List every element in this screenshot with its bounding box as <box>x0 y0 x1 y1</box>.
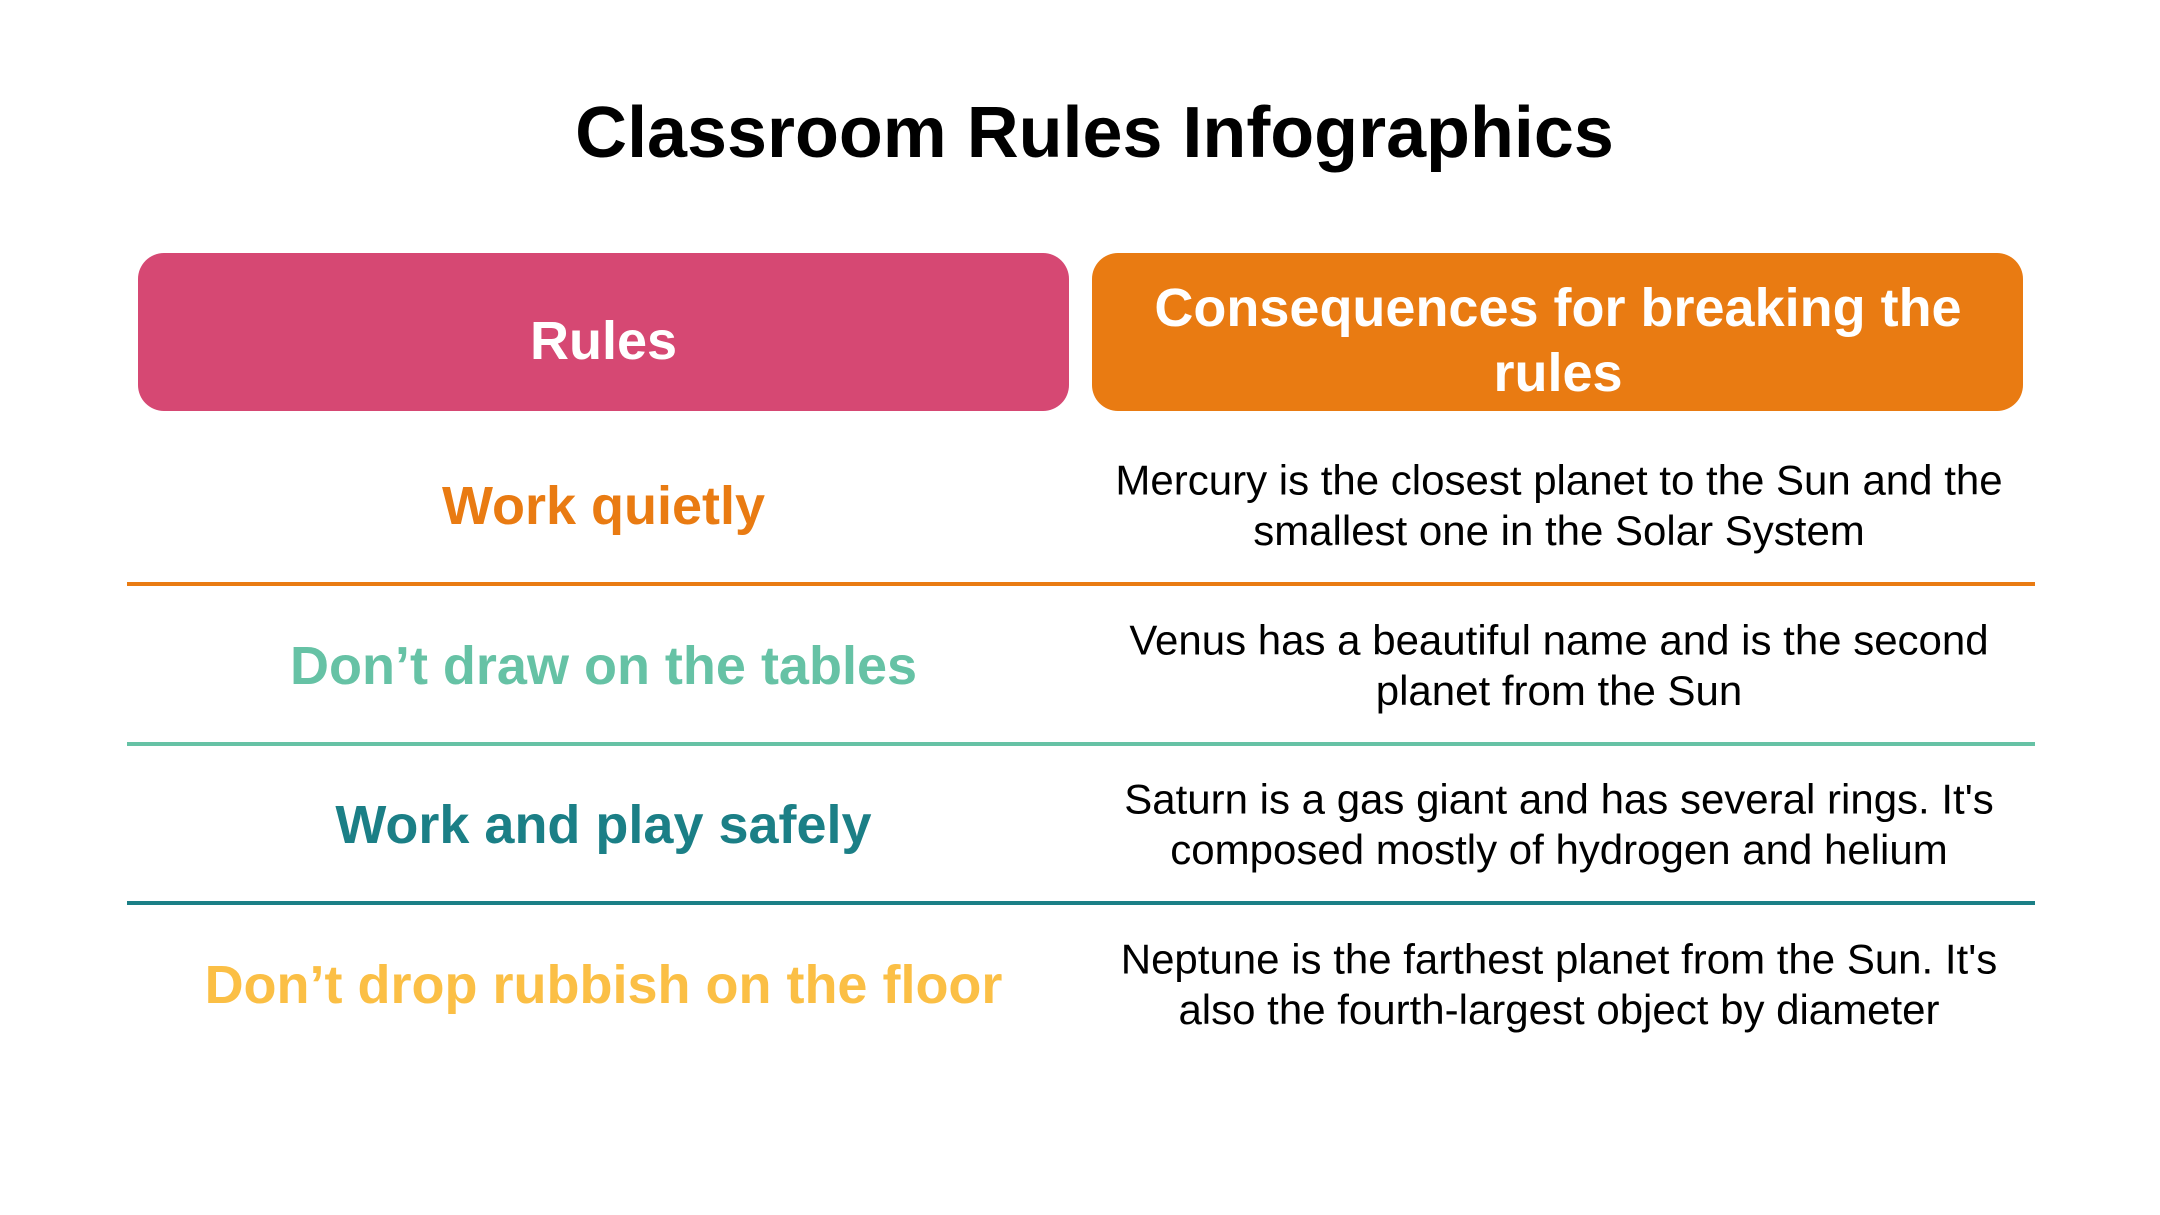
row 1: work quietly: Mercury is the closest planet to the Sun and the <box>1115 456 2003 504</box>
row 4: don't drop rubbish on the floor: also the fourth-largest object by diameter <box>1178 986 1940 1033</box>
panel: consequences header: Consequences for breaking the <box>1154 278 1962 338</box>
title: Classroom Rules Infographics <box>575 93 1614 173</box>
panel: consequences header <box>1092 253 2023 411</box>
row 4: don't drop rubbish on the floor <box>205 936 1997 1033</box>
row 3: work and play safely: Work and play safely <box>335 795 872 855</box>
panel: rules header: Rules <box>530 311 677 371</box>
row 1: work quietly <box>127 456 2035 586</box>
row 3: work and play safely: composed mostly of hydrogen and helium <box>1170 826 1948 873</box>
row 1: work quietly: Work quietly <box>442 476 765 536</box>
row 3: work and play safely <box>127 776 2035 905</box>
row 2: don't draw on the tables <box>127 616 2035 746</box>
row 1: work quietly: smallest one in the Solar System <box>1253 507 1865 554</box>
row 3: work and play safely: Saturn is a gas giant and has several rings. It's <box>1124 776 1994 822</box>
row 4: don't drop rubbish on the floor: Don’t drop rubbish on the floor <box>205 955 1002 1015</box>
panel: consequences header: rules <box>1493 343 1623 403</box>
row 4: don't drop rubbish on the floor: Neptune is the farthest planet from the Sun. It's <box>1121 936 1997 982</box>
row 2: don't draw on the tables: planet from the Sun <box>1376 667 1742 714</box>
row 2: don't draw on the tables: Don’t draw on the tables <box>290 636 917 696</box>
panel: rules header <box>138 253 1069 411</box>
row 2: don't draw on the tables: Venus has a beautiful name and is the second <box>1129 616 1989 664</box>
